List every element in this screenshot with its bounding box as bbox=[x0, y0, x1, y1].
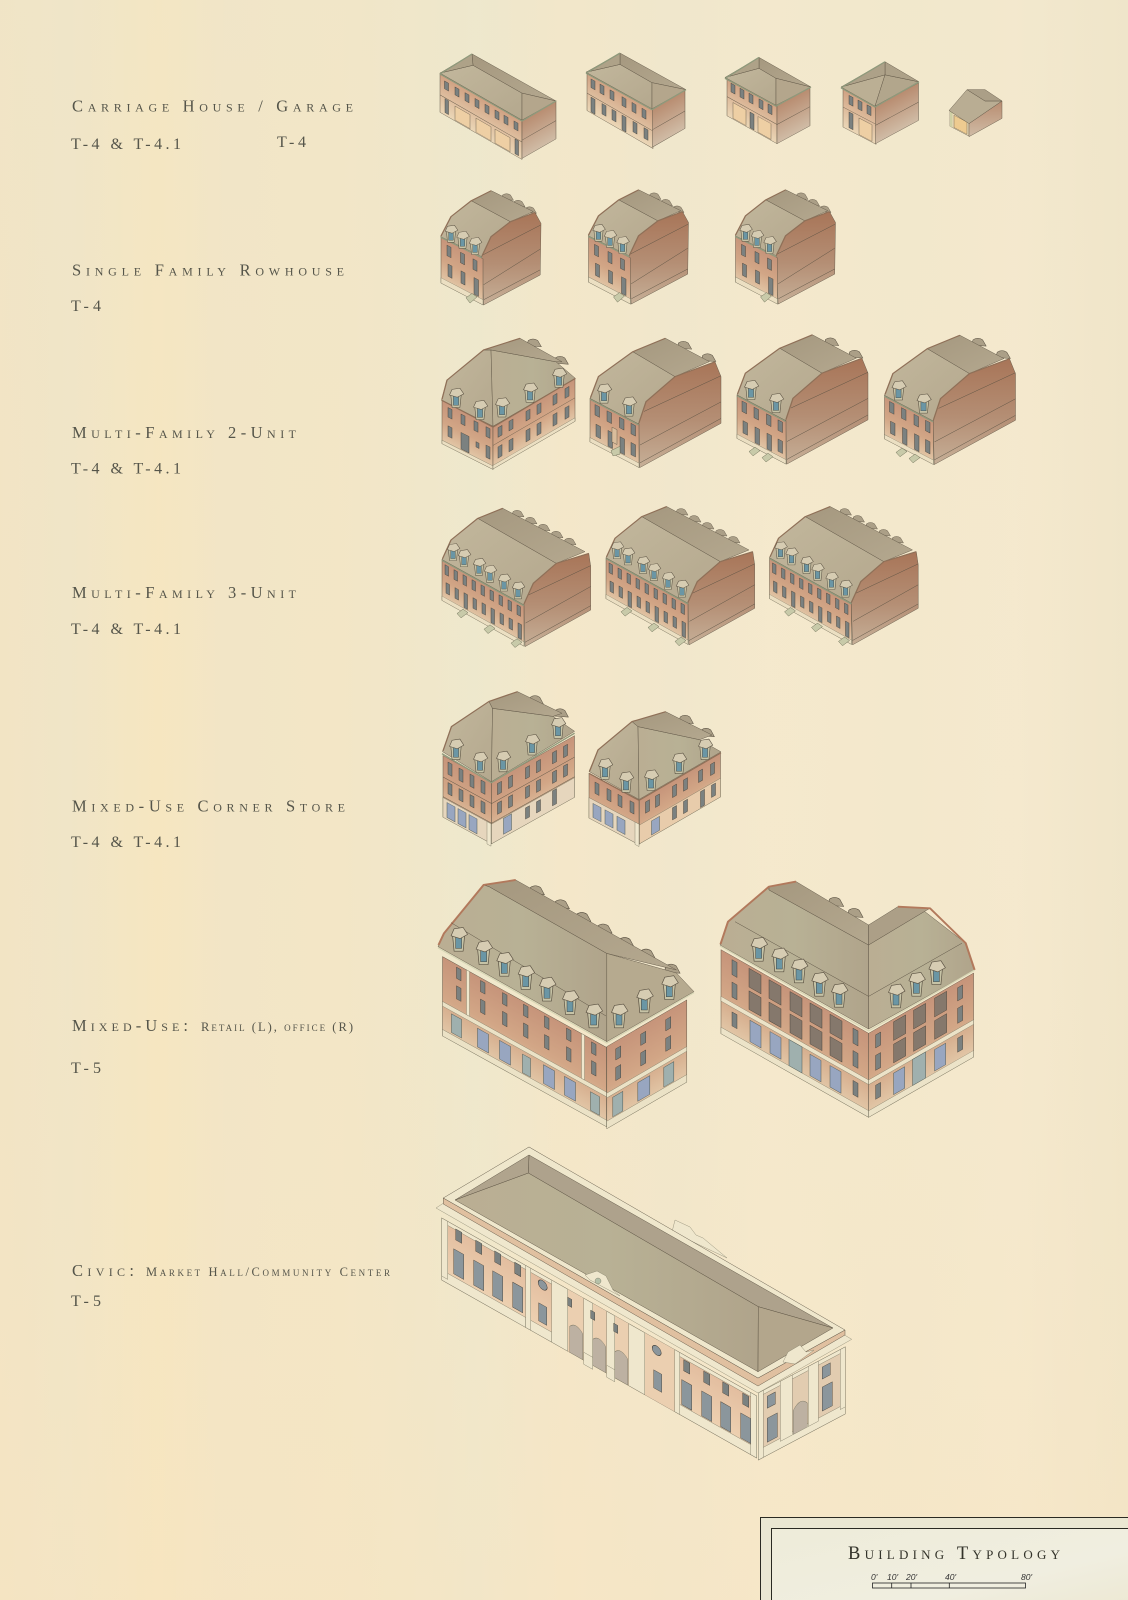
title block bbox=[760, 1518, 1128, 1600]
building: corner store tall bbox=[442, 692, 575, 846]
label: Mixed-Use retail and office: Mixed-Use: bbox=[72, 1016, 188, 1035]
label: Multi-Family 3-Unit: Multi-Family 3-Unit bbox=[72, 583, 297, 602]
building: mixed-use retail bbox=[438, 880, 694, 1129]
label: Mixed-Use Corner Store: Mixed-Use Corner Store bbox=[72, 796, 345, 816]
label: Single Family Rowhouse: T-4 bbox=[71, 298, 101, 315]
building: carriage house, six bay bbox=[586, 53, 686, 148]
label: Single Family Rowhouse: Single Family Rowhouse bbox=[72, 260, 344, 280]
scale bar: 0' bbox=[871, 1572, 878, 1582]
scale bar bbox=[871, 1572, 1032, 1588]
civic long facade bbox=[442, 1218, 757, 1462]
scale bar: 20' bbox=[905, 1572, 917, 1582]
building: carriage house, small pyramid roof bbox=[841, 62, 919, 144]
label: Carriage House / Garage: Carriage House / Garage bbox=[72, 96, 353, 116]
building: three-unit 3 bbox=[770, 507, 918, 646]
label: Multi-Family 2-Unit: Multi-Family 2-Unit bbox=[72, 423, 297, 442]
label: Mixed-Use retail and office: Retail (L), office (R) bbox=[201, 1020, 353, 1034]
civic end facade bbox=[758, 1347, 845, 1460]
label: Multi-Family 3-Unit: T-4 & T-4.1 bbox=[71, 621, 181, 638]
building: carriage house, three garage doors bbox=[440, 54, 556, 159]
title: Building Typology bbox=[848, 1544, 1061, 1564]
label: Civic: Market Hall/Community Center bbox=[146, 1265, 390, 1279]
label: Mixed-Use retail and office bbox=[71, 1016, 353, 1077]
label: Civic bbox=[71, 1261, 390, 1310]
building: two-unit hipped corner bbox=[442, 338, 575, 469]
scale bar: 40' bbox=[945, 1572, 956, 1582]
outer frame bbox=[760, 1518, 1128, 1600]
building: rowhouse 3 bbox=[735, 190, 836, 304]
building: three-unit 2 bbox=[606, 507, 755, 646]
building: corner store short bbox=[589, 712, 721, 847]
building: civic market hall bbox=[436, 1147, 852, 1462]
label: Mixed-Use retail and office: T-5 bbox=[71, 1060, 101, 1077]
label: Single Family Rowhouse bbox=[71, 260, 344, 315]
label: Carriage House / Garage bbox=[71, 96, 353, 153]
building: three-unit 1 bbox=[442, 508, 591, 647]
inner frame bbox=[772, 1528, 1128, 1600]
scale bar: 80' bbox=[1021, 1572, 1032, 1582]
building: rowhouse 2 bbox=[588, 190, 688, 304]
label: Multi-Family 3-Unit bbox=[71, 583, 297, 638]
building: two-unit side gable B bbox=[737, 335, 868, 464]
building: two-unit side gable A bbox=[590, 338, 721, 468]
label: Carriage House / Garage: T-4 & T-4.1 bbox=[71, 136, 181, 153]
label: Mixed-Use Corner Store: T-4 & T-4.1 bbox=[71, 834, 181, 851]
label: Multi-Family 2-Unit bbox=[71, 423, 297, 478]
scale bar: 10' bbox=[887, 1572, 898, 1582]
building: rowhouse 1 bbox=[441, 191, 541, 305]
civic rear parapet ornament bbox=[672, 1220, 727, 1258]
building: mixed-use office bbox=[720, 882, 975, 1117]
building: carriage house, medium bbox=[725, 57, 811, 144]
building: two-unit side gable C bbox=[884, 335, 1016, 465]
label: Civic: Civic: bbox=[72, 1261, 134, 1280]
label: Carriage House / Garage: T-4 bbox=[277, 134, 306, 151]
civic roof bbox=[436, 1147, 852, 1393]
label: Multi-Family 2-Unit: T-4 & T-4.1 bbox=[71, 460, 181, 478]
label: Civic: T-5 bbox=[71, 1293, 101, 1310]
label: Mixed-Use Corner Store bbox=[71, 796, 345, 851]
building: small garage bbox=[949, 90, 1002, 137]
